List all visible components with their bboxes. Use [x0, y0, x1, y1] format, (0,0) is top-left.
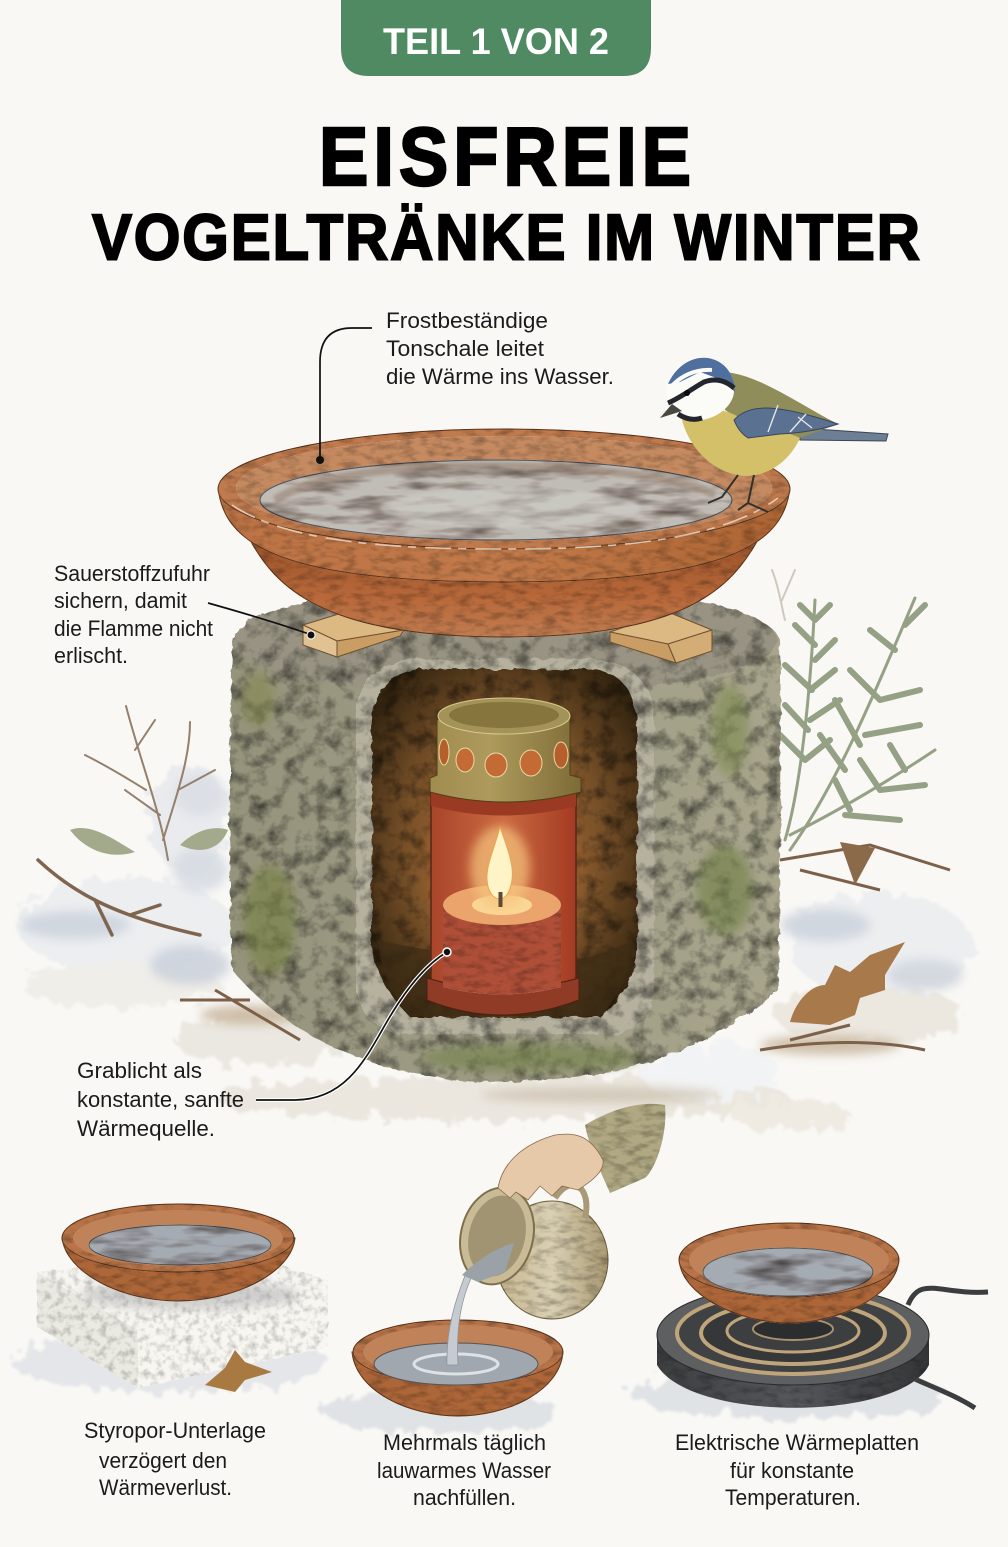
title: EISFREIE: [319, 110, 691, 203]
panel: electric heating plate: [630, 1223, 988, 1510]
main clay bowl: [218, 429, 790, 637]
panel: styrofoam base: verzögert den: [99, 1448, 227, 1473]
caption: Elektrische Wärmeplatten: [675, 1430, 919, 1455]
bird head: [666, 357, 734, 420]
wooden spacer left: [303, 612, 404, 657]
snow patch: [630, 1371, 950, 1419]
candle lid: [430, 710, 581, 802]
bird legs: [708, 475, 768, 512]
stone cylinder: [230, 584, 781, 1082]
title: [92, 110, 920, 274]
tab: part label: [341, 0, 651, 76]
dead leaves and twigs right: [180, 842, 950, 1050]
callout: oxygen: Sauerstoffzufuhr: [54, 561, 210, 586]
wax: [443, 905, 561, 994]
callout: candle: konstante, sanfte: [77, 1087, 244, 1112]
bird tail: [800, 428, 888, 441]
panel: refill warm water: nachfüllen.: [413, 1485, 516, 1510]
tab: part label: TEIL 1 VON 2: [383, 21, 609, 62]
small clay bowl: [62, 1238, 295, 1301]
panel: refill warm water: lauwarmes Wasser: [377, 1458, 551, 1483]
callout: oxygen: erlischt.: [54, 643, 128, 668]
panel: refill warm water: [320, 1104, 665, 1510]
bowl rim: [218, 429, 790, 549]
leaf: [205, 1350, 272, 1392]
lower clay bowl: [352, 1352, 563, 1416]
niche opening: [356, 659, 654, 1034]
snow patch: [10, 1332, 330, 1392]
candle jar: [431, 790, 576, 994]
jar base: [427, 978, 579, 1015]
bird wing: [734, 408, 838, 438]
callout: clay bowl: Tonschale leitet: [386, 336, 544, 361]
wooden spacer right: [610, 612, 712, 663]
callout: oxygen: sichern, damit: [54, 588, 187, 613]
left bare twigs: [38, 706, 228, 935]
memorial candle: [427, 698, 581, 1015]
bird belly: [682, 410, 800, 476]
caption: Styropor-Unterlage: [84, 1418, 266, 1443]
cables: [896, 1288, 988, 1408]
right fir branch: [772, 570, 935, 850]
hand: [498, 1134, 603, 1200]
callout: candle: [77, 948, 451, 1141]
arm sleeve: [585, 1104, 665, 1193]
callout: clay bowl: [316, 308, 614, 464]
callout: oxygen: [54, 561, 315, 668]
plate: [657, 1335, 929, 1408]
blue tit: [660, 357, 888, 512]
panel: styrofoam base: [10, 1204, 330, 1500]
water surface: [260, 460, 732, 540]
bowl body: [250, 540, 758, 637]
panel: styrofoam base: Wärmeverlust.: [99, 1475, 232, 1500]
callout: candle: Grablicht als: [77, 1058, 202, 1083]
water stream: [447, 1268, 474, 1365]
bird back: [725, 372, 838, 445]
panel: electric heating plate: Temperaturen.: [725, 1485, 861, 1510]
callout: clay bowl: Frostbeständige: [386, 308, 548, 333]
flame: [470, 826, 530, 910]
callout: oxygen: die Flamme nicht: [54, 616, 213, 641]
snowy ground: [17, 765, 972, 1131]
clay bowl on plate: [679, 1260, 899, 1323]
caption: Mehrmals täglich: [383, 1430, 546, 1455]
callout: clay bowl: die Wärme ins Wasser.: [386, 364, 614, 389]
jug: [496, 1201, 608, 1319]
jar neck: [431, 782, 576, 816]
title: VOGELTRÄNKE IM WINTER: [92, 201, 920, 274]
styrofoam block: [37, 1248, 328, 1388]
callout: candle: Wärmequelle.: [77, 1116, 215, 1141]
snow patch: [320, 1392, 560, 1432]
panel: electric heating plate: für konstante: [730, 1458, 854, 1483]
bowl shadow on block: [80, 1281, 300, 1309]
